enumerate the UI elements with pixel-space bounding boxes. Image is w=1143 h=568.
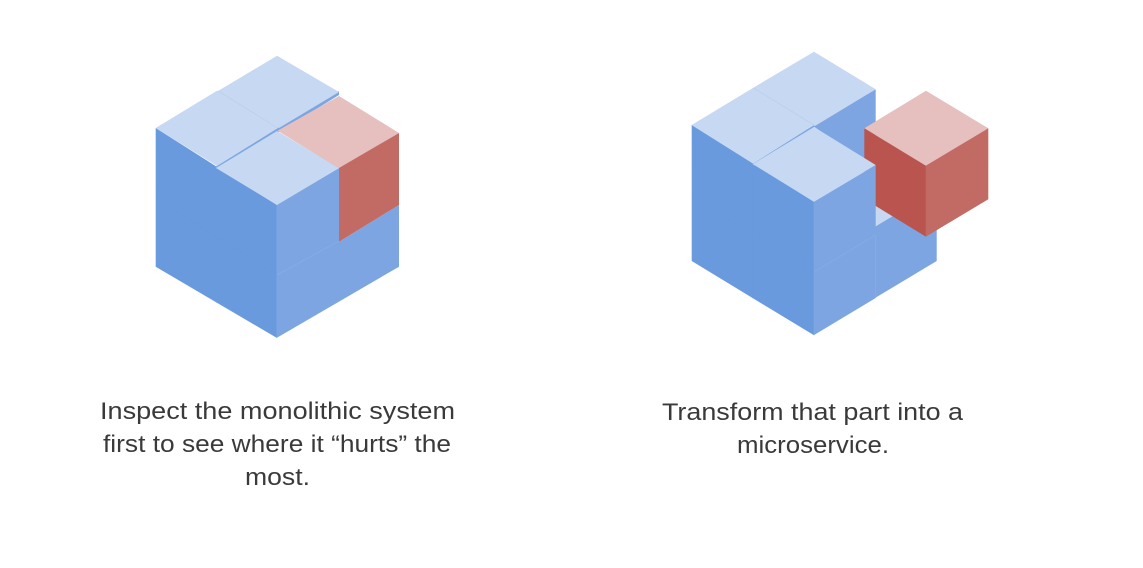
red cube right <box>926 128 988 237</box>
top seam <box>752 125 816 166</box>
highlighted red block <box>278 96 399 242</box>
caption: transform: Transform that part into a <box>662 399 964 426</box>
top tile: back <box>218 56 339 128</box>
main block left face <box>692 125 814 335</box>
back block right face <box>813 89 876 170</box>
caption: inspect: Inspect the monolithic system <box>100 398 455 425</box>
microservice red cube <box>864 91 988 237</box>
caption: inspect: first to see where it “hurts” the <box>103 431 451 458</box>
red face <box>339 133 399 242</box>
caption: inspect <box>100 398 455 491</box>
cube right face <box>276 168 399 338</box>
caption: inspect: most. <box>245 464 310 491</box>
red cube left <box>864 128 926 237</box>
top tile: front <box>216 131 339 205</box>
top tile: front <box>753 127 876 202</box>
top tile: back <box>753 52 876 126</box>
caption: transform: microservice. <box>737 432 889 459</box>
cube left face <box>156 128 277 338</box>
panel: extracted microservice cube <box>692 52 988 335</box>
top seam <box>215 91 339 169</box>
top tile: left <box>156 91 278 166</box>
caption: transform <box>662 399 964 459</box>
red cube top <box>864 91 988 166</box>
inner floor <box>875 200 900 227</box>
top tile: left <box>692 88 814 163</box>
red top <box>278 96 399 168</box>
main block right face <box>814 165 876 335</box>
panel: monolith inspection cube <box>156 56 399 338</box>
lower right block <box>870 190 937 301</box>
